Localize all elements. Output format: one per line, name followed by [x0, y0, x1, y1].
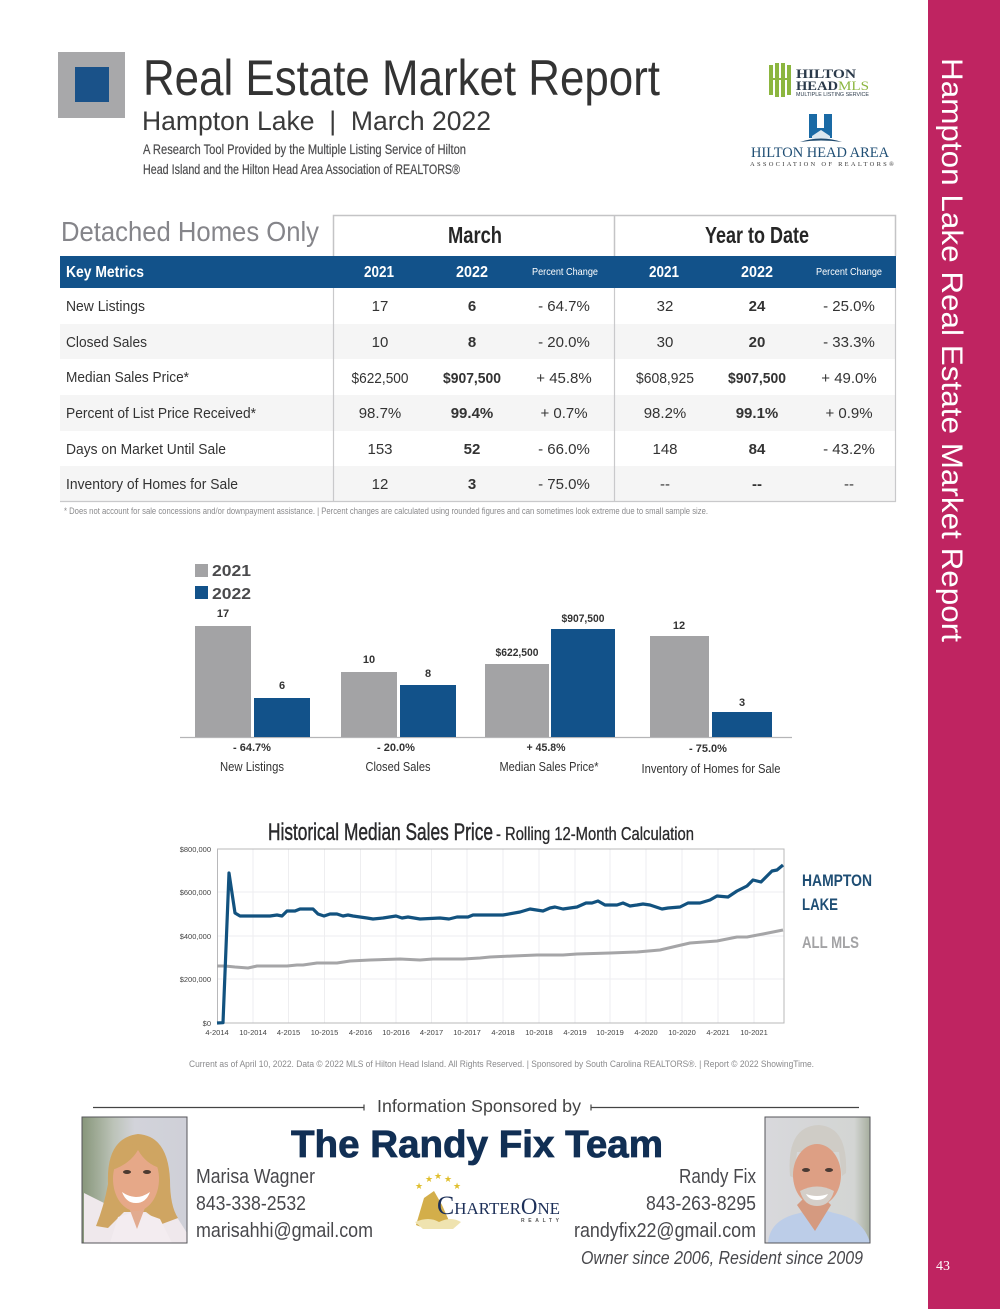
row: New Listings: 32 — [657, 298, 673, 315]
logo: Charter One Realty: ★ — [434, 1171, 442, 1181]
logo: Charter One Realty: ★ — [453, 1181, 461, 1191]
x axis labels: 10-2021 — [740, 1028, 768, 1037]
metrics table — [60, 216, 896, 502]
contact: Randy Fix: 843-263-8295 — [646, 1192, 756, 1215]
row: Median Sales Price: + 49.0% — [821, 370, 877, 387]
row: Closed Sales: 8 — [468, 334, 476, 351]
row: Inventory of Homes for Sale: -- — [660, 476, 670, 493]
table header row: Percent Change — [532, 266, 598, 278]
bars: Closed Sales: Closed Sales — [366, 760, 430, 774]
intro text — [143, 141, 466, 177]
bars: New Listings: 6 — [279, 680, 285, 692]
row: New Listings: 6 — [468, 298, 476, 315]
row: New Listings: - 25.0% — [823, 298, 875, 315]
row: Closed Sales: 30 — [657, 334, 673, 351]
x axis labels: 10-2020 — [668, 1028, 696, 1037]
x axis labels: 4-2020 — [634, 1028, 658, 1037]
intro text: Head Island and the Hilton Head Area Association of REALTORS® — [143, 161, 461, 177]
y axis labels: $0 — [203, 1019, 211, 1028]
bars: Inventory of Homes for Sale: Inventory of Homes for Sale — [642, 762, 781, 776]
legend: 2022 — [212, 586, 251, 603]
table footnote: * Does not account for sale concessions and/or downpayment assistance. | Percent changes are calculated using rounded figures and can sometimes look extreme due to small sample size. — [64, 506, 708, 516]
x axis labels: 10-2018 — [525, 1028, 553, 1037]
row: Percent of List Price Received: 98.2% — [644, 405, 686, 422]
contact: Marisa Wagner — [196, 1165, 373, 1242]
photo: Randy Fix — [765, 1117, 870, 1243]
table header row: Percent Change — [816, 266, 882, 278]
row: Inventory of Homes for Sale: -- — [752, 476, 762, 493]
x axis labels: 10-2015 — [311, 1028, 338, 1037]
title: Real Estate Market Report — [143, 50, 660, 106]
photo frame: Marisa Wagner — [82, 1117, 187, 1243]
row: Median Sales Price: $907,500 — [443, 370, 501, 387]
y axis labels — [180, 845, 211, 1028]
row: Median Sales Price — [66, 369, 877, 387]
table header row — [60, 256, 896, 288]
table header row: Key Metrics — [66, 264, 144, 281]
row: Days on Market Until Sale: Days on Market Until Sale — [66, 441, 226, 458]
header icon: square — [58, 52, 125, 118]
row: Median Sales Price: $907,500 — [728, 370, 786, 387]
bars: Closed Sales: 8 — [425, 668, 431, 680]
contact: Randy Fix — [574, 1165, 757, 1242]
row: Median Sales Price: $622,500 — [352, 370, 408, 387]
bars: Closed Sales — [341, 654, 456, 774]
photo frame: Randy Fix — [765, 1117, 870, 1243]
logo: Hilton Head MLS: HEAD — [796, 78, 838, 93]
series label: Hampton Lake — [802, 871, 872, 914]
section heading: Detached Homes Only: Detached Homes Only — [61, 216, 319, 247]
sponsor heading: Information Sponsored by — [377, 1096, 581, 1116]
bars: Median Sales Price — [485, 613, 615, 774]
logo: Hilton Head MLS: MULTIPLE LISTING SERVICE — [796, 92, 869, 98]
row: New Listings: - 64.7% — [538, 298, 590, 315]
row: Closed Sales: - 20.0% — [538, 334, 590, 351]
grid — [217, 849, 784, 1023]
line: All MLS — [217, 930, 783, 968]
bars: Inventory of Homes for Sale: 12 — [673, 620, 685, 632]
row: Days on Market Until Sale: - 43.2% — [823, 441, 875, 458]
row: Percent of List Price Received: Percent of List Price Received* — [66, 405, 256, 422]
line chart title: Historical Median Sales Price — [268, 819, 493, 846]
team name: The Randy Fix Team — [291, 1124, 663, 1166]
line chart: historical median sales price — [180, 845, 872, 1037]
row: Days on Market Until Sale: 153 — [367, 441, 393, 458]
x axis labels: 4-2019 — [563, 1028, 587, 1037]
logo: Hilton Head Area — [750, 114, 894, 168]
y axis labels: $600,000 — [180, 888, 211, 897]
row: Percent of List Price Received: + 0.7% — [540, 405, 588, 422]
row: Closed Sales: Closed Sales — [66, 334, 147, 351]
sidebar — [928, 0, 1000, 1309]
row: Inventory of Homes for Sale: -- — [844, 476, 854, 493]
logo: Charter One Realty — [415, 1171, 560, 1229]
bars: Median Sales Price: $622,500 — [496, 647, 538, 659]
contact: Marisa Wagner: 843-338-2532 — [196, 1192, 306, 1215]
bars: Median Sales Price: $907,500 — [562, 613, 604, 625]
row: Percent of List Price Received: + 0.9% — [825, 405, 873, 422]
page number: 43 — [936, 1259, 950, 1274]
logo: Hilton Head Area: ASSOCIATION OF REALTORS® — [750, 161, 894, 168]
row: Median Sales Price: Median Sales Price* — [66, 369, 189, 386]
logo: Hilton Head MLS — [769, 63, 869, 98]
x axis labels — [205, 1028, 768, 1037]
table header row: 2022 — [741, 264, 773, 281]
row: Median Sales Price: $608,925 — [636, 370, 694, 387]
logo: Hilton Head Area: HILTON HEAD AREA — [751, 145, 890, 161]
legend: 2021 — [212, 563, 251, 580]
row: New Listings — [66, 298, 875, 315]
row: New Listings: 17 — [372, 298, 388, 315]
row: Closed Sales: - 33.3% — [823, 334, 875, 351]
row: Days on Market Until Sale: 148 — [652, 441, 678, 458]
x axis labels: 4-2017 — [420, 1028, 443, 1037]
x axis labels: 4-2016 — [349, 1028, 372, 1037]
row shading and rules — [60, 288, 896, 502]
x axis labels: 4-2015 — [277, 1028, 300, 1037]
row: Days on Market Until Sale — [66, 441, 875, 458]
contact: Marisa Wagner: marisahhi@gmail.com — [196, 1219, 373, 1242]
x axis labels: 10-2017 — [453, 1028, 481, 1037]
bars: Median Sales Price: Median Sales Price* — [500, 760, 599, 774]
contact: Randy Fix: Randy Fix — [679, 1165, 757, 1188]
series label: All MLS: ALL MLS — [802, 933, 859, 952]
bars: New Listings: - 64.7% — [233, 742, 271, 754]
y axis labels: $800,000 — [180, 845, 211, 854]
row: Closed Sales: 10 — [372, 334, 388, 351]
logo: Hilton Head MLS: MLS — [838, 78, 869, 93]
row: Days on Market Until Sale: 52 — [464, 441, 480, 458]
table header row: 2022 — [456, 264, 488, 281]
line: Hampton Lake — [217, 865, 783, 1023]
series label: Hampton Lake: HAMPTON — [802, 871, 872, 890]
row: Median Sales Price: + 45.8% — [536, 370, 592, 387]
bars: Median Sales Price: + 45.8% — [526, 742, 566, 754]
logo: Charter One Realty: ★ — [415, 1181, 423, 1191]
bars: New Listings: 17 — [217, 608, 229, 620]
logo: Hilton Head MLS: HILTON — [796, 66, 857, 81]
table header row: 2021 — [364, 264, 394, 281]
bars: Closed Sales: 10 — [363, 654, 375, 666]
y axis labels: $200,000 — [180, 975, 211, 984]
logo: Charter One Realty: CHARTERONE — [437, 1191, 560, 1220]
bars: New Listings — [195, 608, 310, 774]
logo: Charter One Realty: REALTY — [521, 1218, 560, 1224]
x axis labels: 10-2014 — [239, 1028, 267, 1037]
bar chart — [180, 563, 792, 776]
bars: Inventory of Homes for Sale — [642, 620, 781, 776]
subtitle: Hampton Lake | March 2022 — [142, 106, 491, 136]
series label: Hampton Lake: LAKE — [802, 895, 838, 914]
data source note: Current as of April 10, 2022. Data © 2022 MLS of Hilton Head Island. All Rights Reserved. | Sponsored by South Carolina REALTORS®. | Report © 2022 ShowingTime. — [189, 1059, 814, 1069]
legend — [195, 563, 251, 603]
row: Percent of List Price Received — [66, 405, 873, 422]
row: Days on Market Until Sale: - 66.0% — [538, 441, 590, 458]
row: Inventory of Homes for Sale: 12 — [372, 476, 388, 493]
table period headers — [334, 216, 896, 256]
row: Inventory of Homes for Sale — [66, 476, 854, 493]
table header row: 2021 — [649, 264, 679, 281]
row: Closed Sales: 20 — [749, 334, 765, 351]
x axis labels: 4-2018 — [491, 1028, 515, 1037]
x axis labels: 4-2014 — [205, 1028, 229, 1037]
sponsor heading — [93, 1096, 859, 1116]
table period headers: Year to Date — [705, 222, 809, 248]
row: Inventory of Homes for Sale: 3 — [468, 476, 476, 493]
contact: Marisa Wagner: Marisa Wagner — [196, 1165, 315, 1188]
row: New Listings: New Listings — [66, 298, 145, 315]
row: Closed Sales — [66, 334, 875, 351]
y axis labels: $400,000 — [180, 932, 211, 941]
line chart title: - Rolling 12-Month Calculation — [496, 824, 694, 844]
contact: Randy Fix: randyfix22@gmail.com — [574, 1219, 756, 1242]
sidebar title: Hampton Lake Real Estate Market Report — [935, 58, 968, 642]
intro text: A Research Tool Provided by the Multiple Listing Service of Hilton — [143, 141, 466, 157]
logo: Charter One Realty: ★ — [425, 1174, 433, 1184]
row: Days on Market Until Sale: 84 — [749, 441, 766, 458]
x axis labels: 10-2019 — [596, 1028, 624, 1037]
table period headers: March — [448, 222, 502, 248]
tagline: Owner since 2006, Resident since 2009 — [581, 1247, 863, 1268]
row: New Listings: 24 — [749, 298, 766, 315]
bars: New Listings: New Listings — [220, 760, 284, 774]
bars: Closed Sales: - 20.0% — [377, 742, 415, 754]
row: Percent of List Price Received: 99.4% — [451, 405, 493, 422]
row: Percent of List Price Received: 99.1% — [736, 405, 778, 422]
x axis labels: 10-2016 — [382, 1028, 410, 1037]
bars: Inventory of Homes for Sale: - 75.0% — [689, 743, 727, 755]
row: Inventory of Homes for Sale: - 75.0% — [538, 476, 590, 493]
bars: Inventory of Homes for Sale: 3 — [739, 697, 745, 709]
logo: Charter One Realty: ★ — [444, 1174, 452, 1184]
x axis labels: 4-2021 — [706, 1028, 730, 1037]
photo: Marisa Wagner — [82, 1117, 187, 1243]
row: Inventory of Homes for Sale: Inventory of Homes for Sale — [66, 476, 238, 493]
row: Percent of List Price Received: 98.7% — [359, 405, 401, 422]
